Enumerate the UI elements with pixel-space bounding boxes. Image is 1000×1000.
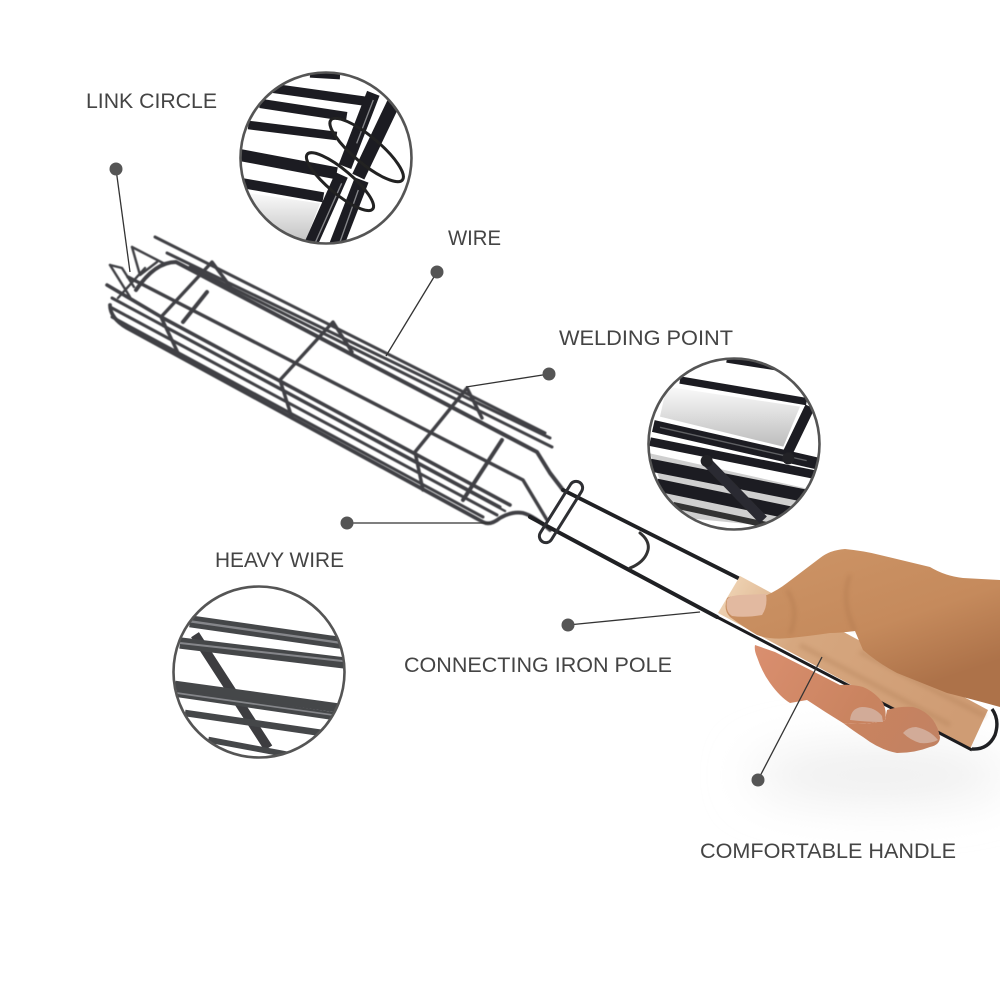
U loop — [630, 533, 648, 568]
detail circle: link rings — [240, 72, 412, 253]
cage: grill basket wires — [107, 237, 563, 530]
label: comfortable handle: COMFORTABLE HANDLE — [700, 840, 956, 863]
thumb crease shading — [787, 575, 855, 634]
label: welding point: WELDING POINT — [559, 327, 733, 350]
end loop — [972, 709, 997, 749]
wood grain shade — [800, 645, 985, 725]
nail 2 — [903, 727, 938, 743]
end detail — [110, 247, 165, 298]
cross ring 1 — [161, 262, 235, 353]
leader lines — [116, 169, 822, 780]
marker dots — [110, 162, 764, 786]
label: link circle: LINK CIRCLE — [86, 90, 217, 113]
brace 3 — [463, 440, 502, 500]
label: wire: WIRE — [448, 227, 501, 250]
detail circle: heavy wire — [174, 586, 345, 758]
index finger — [755, 645, 886, 724]
lower edge rod over wood — [717, 617, 972, 750]
leader: welding point — [466, 374, 549, 387]
nail 1 — [850, 707, 883, 722]
leader: wire — [386, 272, 437, 356]
leader: heavy wire — [347, 522, 490, 524]
wooden handle — [718, 576, 988, 749]
label: connecting iron pole: CONNECTING IRON POLE — [404, 654, 672, 677]
central rod — [128, 277, 547, 520]
leader: link circle — [116, 169, 130, 272]
lower rod — [530, 517, 717, 617]
link ring — [537, 479, 585, 545]
thumbnail — [727, 594, 766, 617]
handle rods — [530, 479, 738, 617]
upper rod — [563, 490, 738, 578]
fingers — [755, 645, 940, 753]
leader: connecting iron pole — [568, 612, 700, 625]
leader: comfortable handle — [758, 657, 822, 780]
detail circle: welding point — [648, 358, 820, 530]
ring finger — [843, 707, 940, 753]
lower rods — [107, 285, 550, 530]
upper rods — [136, 237, 563, 490]
brace 1 — [183, 292, 207, 322]
hand and thumb — [726, 549, 1000, 707]
table shadow — [750, 749, 1000, 801]
label: heavy wire: HEAVY WIRE — [215, 549, 344, 572]
cross ring 3 — [415, 388, 482, 490]
cross ring 2 — [280, 322, 352, 418]
